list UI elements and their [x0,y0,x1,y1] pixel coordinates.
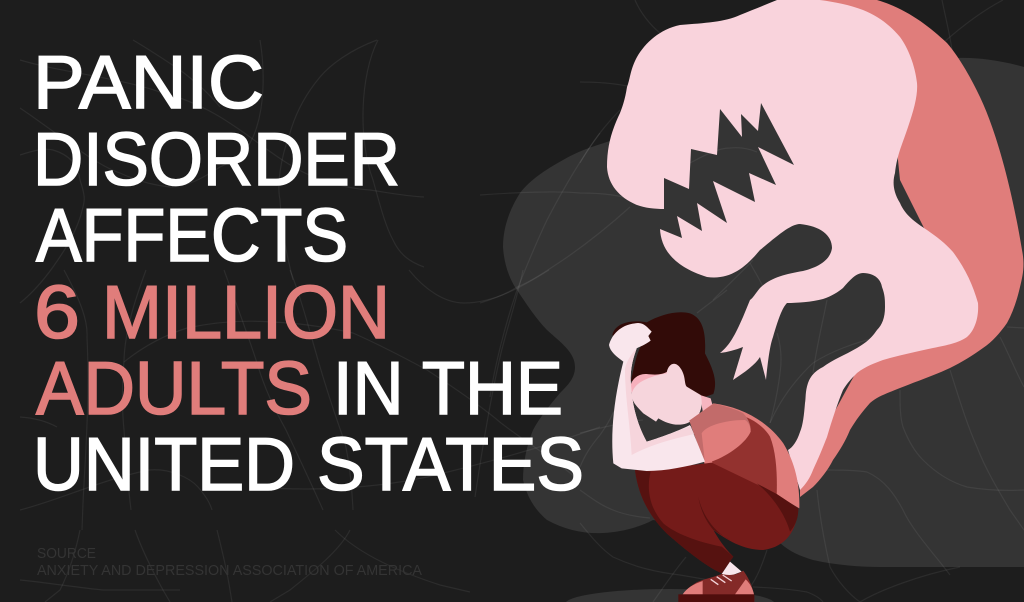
title words: IN THE: IN THE [333,346,563,430]
shoe laces [711,575,732,585]
ground shadow [565,589,775,602]
source name: ANXIETY AND DEPRESSION ASSOCIATION OF AMERICA [37,563,422,579]
person crouching [609,312,799,602]
highlighted number: 6: 6 [34,270,80,354]
hair undertone strip [630,372,670,400]
title line: AFFECTS: AFFECTS [36,193,348,277]
title line: PANIC: PANIC [33,40,264,124]
source label: SOURCE [37,546,96,562]
arm shade [625,348,694,455]
source note [37,546,422,579]
face [632,364,702,425]
neck [700,395,714,415]
shoe heel [735,579,754,594]
highlighted word: ADULTS: ADULTS [36,346,312,430]
sleeve highlight [702,420,751,463]
shoe sole [678,594,754,602]
title [33,40,584,506]
title line: DISORDER: DISORDER [33,117,400,201]
shoe toe [683,581,703,594]
trouser shadow: knee [757,483,798,532]
trouser shadow: lower leg [635,470,733,573]
background blob [503,58,1024,567]
shirt dark panel [703,411,777,496]
title word: STATES: STATES [317,422,584,506]
sock [722,562,742,576]
sleeve [689,403,751,463]
title word: UNITED: UNITED [33,422,295,506]
arm and hand [609,323,705,471]
hair [612,312,715,397]
shoe [678,571,754,602]
body back and shirt [689,403,799,508]
monster: pink ghost body with jagged mouth [607,0,978,490]
monster: back shadow [800,0,1023,497]
trouser shadow: inner leg [698,497,730,540]
highlighted word: MILLION: MILLION [102,270,390,354]
trousers [635,463,798,573]
